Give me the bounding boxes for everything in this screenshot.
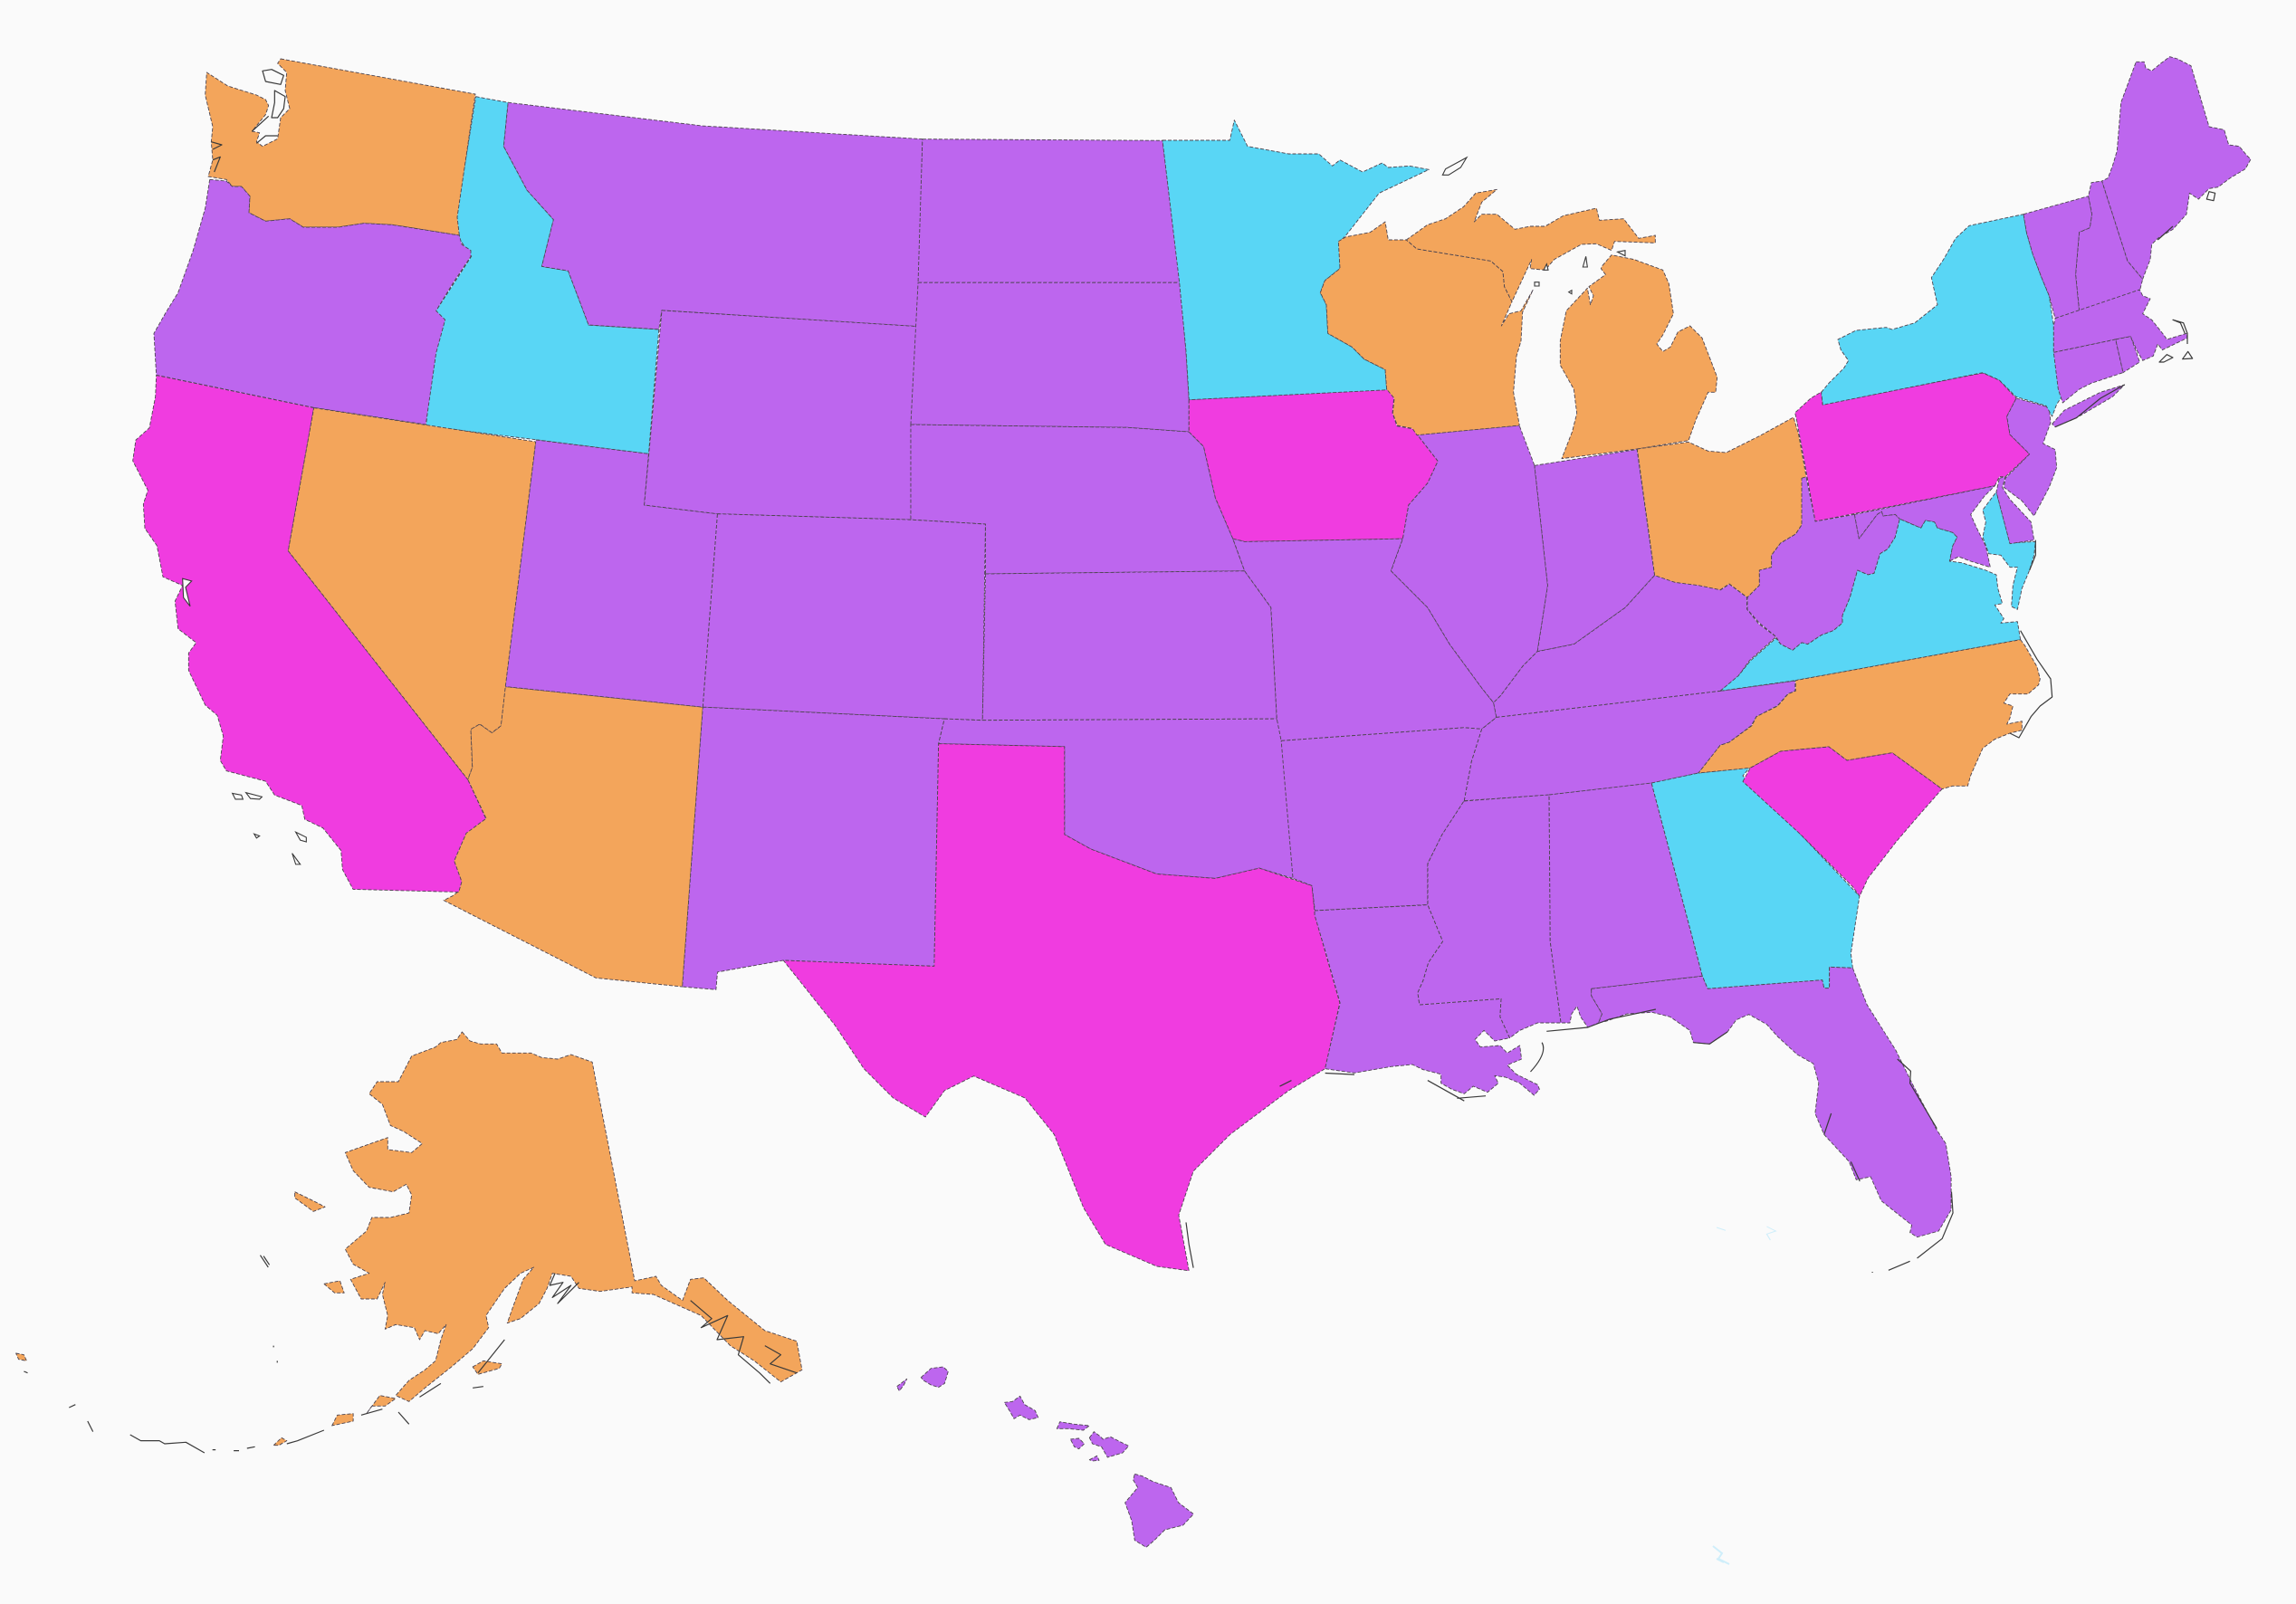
state: Mississippi <box>1418 795 1561 1038</box>
state: New Mexico <box>683 707 944 989</box>
Umnak island <box>273 1437 287 1446</box>
contiguous states: Pacific northwest <box>154 59 475 425</box>
state: Missouri <box>1233 539 1497 740</box>
state: Hawaii <box>897 1367 1193 1547</box>
faint cay marks <box>1717 1227 1775 1240</box>
contiguous states: New York and New England <box>1822 57 2251 427</box>
Nunivak island <box>324 1281 344 1293</box>
state: Arizona <box>444 687 703 987</box>
state: Iowa <box>1189 389 1438 541</box>
state: Georgia <box>1651 768 1860 988</box>
Niihau <box>897 1379 907 1391</box>
state: Washington <box>206 59 475 235</box>
state: Maine <box>2102 57 2251 279</box>
Maui <box>1089 1432 1129 1457</box>
state: Wyoming <box>645 310 918 520</box>
outlines: Cape Cod and coastal islands <box>2055 192 2215 427</box>
state: Indiana <box>1535 450 1655 652</box>
state: Oklahoma <box>939 719 1293 878</box>
Kauai <box>921 1367 948 1388</box>
Oahu <box>1004 1396 1038 1419</box>
state: Illinois <box>1391 425 1547 702</box>
contiguous states: California and Nevada <box>133 376 536 893</box>
Michigan upper peninsula <box>1406 189 1655 301</box>
state: Minnesota <box>1162 120 1429 400</box>
state: South Carolina <box>1743 747 1942 896</box>
state: Arkansas <box>1281 728 1482 911</box>
state: Alaska <box>16 1032 802 1453</box>
state: Montana <box>503 102 923 329</box>
Big Island <box>1125 1474 1193 1547</box>
state: Idaho <box>426 97 659 454</box>
Great Lakes island outlines <box>1442 158 1625 294</box>
contiguous states: Mid-Atlantic and Ohio <box>1637 373 2057 896</box>
outlines: Puget Sound islands <box>211 70 285 172</box>
state: Long Island <box>2052 385 2125 427</box>
state: New Hampshire <box>2076 181 2143 310</box>
state: New York <box>1822 215 2062 416</box>
state: Nebraska <box>911 425 1245 574</box>
outlines: Channel Islands <box>183 578 306 864</box>
state: North Carolina <box>1698 640 2040 789</box>
state: Tennessee <box>1464 681 1795 801</box>
state: New Jersey <box>2004 398 2057 516</box>
Kodiak island <box>473 1361 502 1374</box>
contiguous states: Gulf coast <box>1315 768 1953 1273</box>
state: Colorado <box>703 514 985 721</box>
Alaska Peninsula island <box>367 1396 396 1414</box>
faint territory marks <box>1713 1546 1729 1564</box>
state: Delaware <box>1996 477 2034 544</box>
Lanai <box>1070 1438 1085 1449</box>
Michigan lower peninsula <box>1560 255 1717 459</box>
Molokai <box>1057 1422 1089 1430</box>
state: Florida <box>1592 967 1951 1237</box>
state: Connecticut <box>2053 339 2123 403</box>
state: Vermont <box>2023 196 2092 319</box>
state: Maryland eastern shore <box>1983 492 2035 609</box>
contiguous states: interior west and central <box>263 97 1795 1271</box>
state: Rhode Island <box>2116 337 2139 373</box>
Alaska mainland <box>345 1032 802 1401</box>
outline: Outer Banks <box>2010 540 2052 738</box>
state: Virginia <box>1720 519 2021 691</box>
state: North Dakota <box>918 139 1181 282</box>
state: Massachusetts <box>2053 290 2187 360</box>
state: California <box>133 376 486 893</box>
state: Louisiana <box>1315 905 1539 1095</box>
Unimak island <box>332 1414 353 1426</box>
state: South Dakota <box>911 282 1189 432</box>
state: Kansas <box>982 571 1277 721</box>
state: Nevada <box>288 408 536 779</box>
state: Oregon <box>154 179 471 425</box>
state: Texas <box>783 744 1340 1271</box>
state: Wisconsin <box>1320 222 1533 435</box>
state: Kentucky <box>1494 576 1776 717</box>
state: Maryland <box>1854 486 1995 568</box>
state: Pennsylvania <box>1795 373 2030 521</box>
Aleutian and coastal island outlines <box>24 1256 797 1453</box>
state: West Virginia <box>1747 477 1899 650</box>
state: Ohio <box>1637 417 1806 597</box>
Attu island <box>16 1353 26 1361</box>
contiguous states: Great Lakes <box>1162 120 1717 459</box>
St Lawrence island <box>295 1192 325 1211</box>
outlines: Gulf barrier islands and Florida Keys <box>1457 1009 1953 1273</box>
state: Alabama <box>1549 783 1702 1027</box>
state: Michigan <box>1406 158 1717 459</box>
Kahoolawe <box>1089 1456 1099 1461</box>
outlines: Texas barrier islands and Great Lakes isle <box>263 1073 1464 1268</box>
state: Utah <box>505 440 717 707</box>
